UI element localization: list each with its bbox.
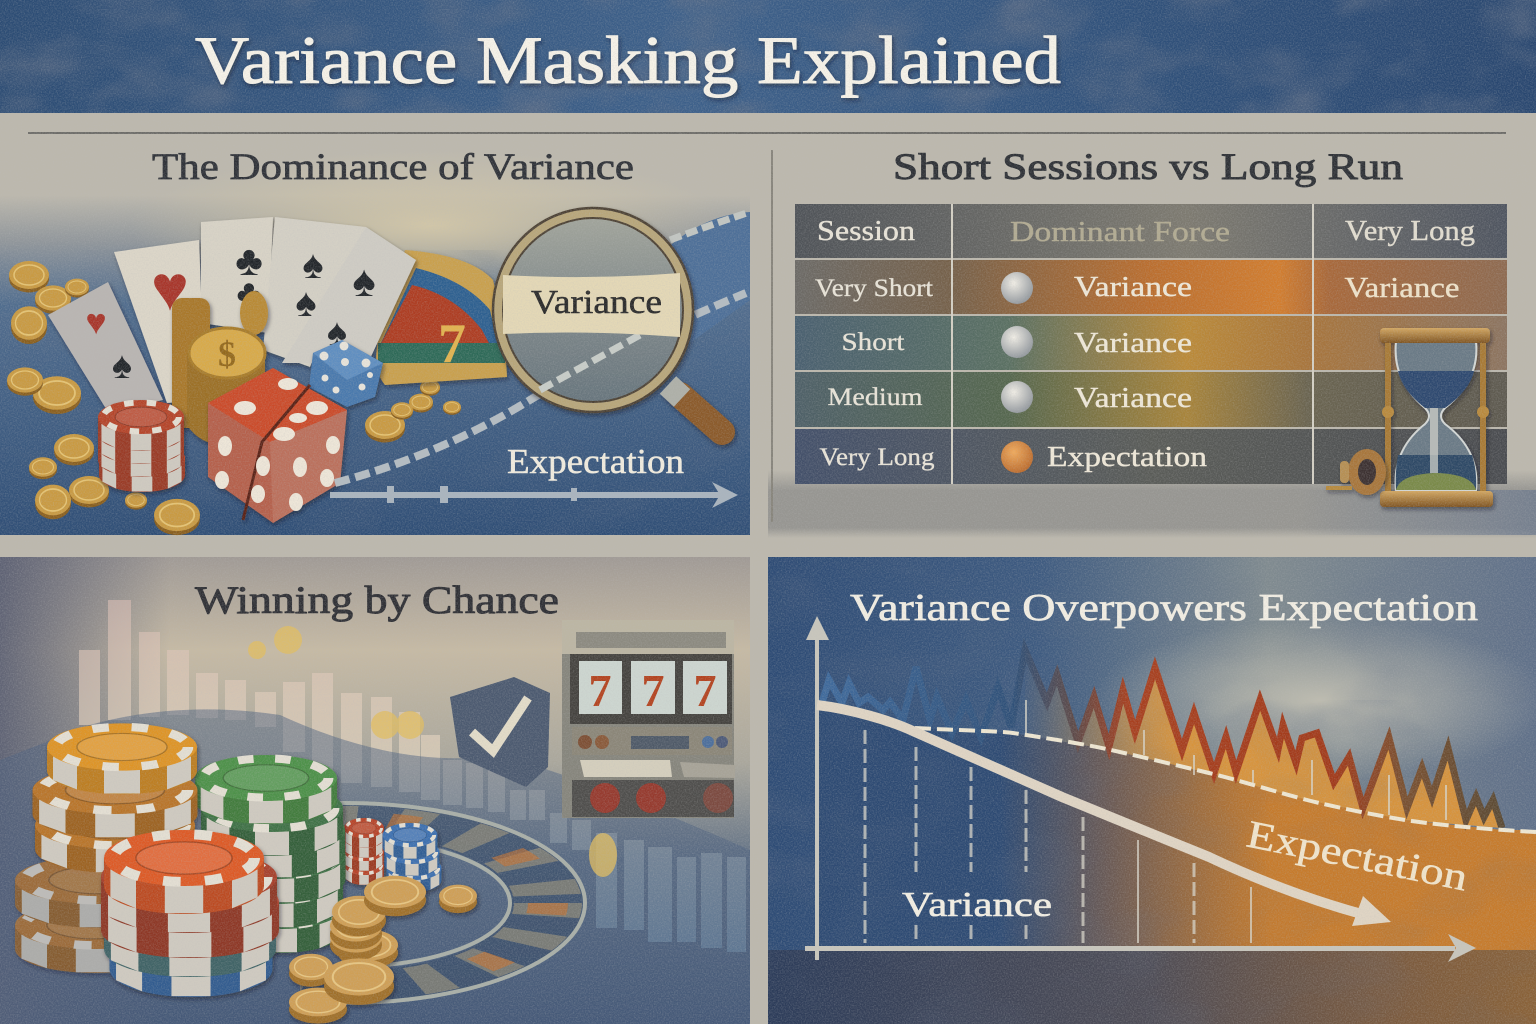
divider: rule under header bbox=[28, 132, 1506, 134]
label: variance ribbon: Variance bbox=[531, 284, 662, 321]
icon: magnifying glass bbox=[493, 208, 722, 432]
arrow: expectation axis bbox=[330, 482, 738, 508]
icon: large red die bbox=[208, 368, 347, 523]
card 3: ♣ bbox=[237, 273, 261, 315]
card 1: ♠ bbox=[112, 345, 132, 387]
chart: vertical dashed guides bbox=[865, 700, 1446, 943]
panel: winning by chance bbox=[0, 557, 750, 1024]
chart: orange region under trend bbox=[817, 705, 1536, 950]
icon: gold coin piles bbox=[289, 876, 477, 1024]
row: very short: Variance bbox=[1074, 271, 1192, 303]
icon: stack of gold coins bbox=[172, 291, 268, 445]
icon: small chip stacks bbox=[344, 818, 442, 892]
panel: short sessions vs long run bbox=[768, 147, 1536, 538]
card 4: ♠ bbox=[295, 280, 317, 325]
arrow: expectation decline bbox=[817, 705, 1391, 926]
table header row: Dominant Force bbox=[1010, 216, 1230, 248]
icon: small blue die bbox=[309, 340, 383, 407]
table: session comparison bbox=[795, 204, 1507, 484]
icon: slot machine: 7 bbox=[694, 665, 716, 716]
heading: short sessions vs long run: Short Sessions vs Long Run bbox=[893, 147, 1403, 188]
label: expectation: Expectation bbox=[1243, 813, 1471, 899]
icon: stack of gold coins: $ bbox=[218, 334, 236, 374]
icon: wave band behind magnifier bbox=[660, 212, 750, 350]
icon: brass stopwatch bbox=[1326, 449, 1386, 495]
chart: dashed trend line bbox=[915, 728, 1536, 832]
title: Variance Masking Explained bbox=[195, 22, 1061, 98]
icon: scattered gold coins bbox=[7, 261, 461, 535]
label: variance ribbon bbox=[503, 273, 680, 337]
table header row bbox=[795, 204, 1507, 258]
card 5 bbox=[282, 227, 416, 363]
card 1 bbox=[48, 282, 163, 412]
row: medium: Variance bbox=[1074, 382, 1192, 414]
header band bbox=[0, 0, 1536, 113]
row: medium: Medium bbox=[828, 384, 923, 411]
row: very long bbox=[795, 429, 1507, 484]
icon: roulette wheel: 7 bbox=[438, 313, 466, 375]
icon: gold sparkles bbox=[248, 626, 617, 877]
card 4: ♠ bbox=[302, 242, 324, 287]
chart: faded bars bbox=[79, 600, 746, 952]
icon: poker chip stack bbox=[98, 400, 185, 492]
row: short bbox=[795, 316, 1507, 370]
card 5: ♠ bbox=[327, 312, 347, 354]
row: short: Short bbox=[842, 329, 905, 356]
icon: hourglass bbox=[1380, 328, 1493, 507]
table header row: Very Long bbox=[1345, 216, 1475, 247]
heading: the dominance of variance: The Dominance of Variance bbox=[152, 147, 634, 188]
icon: red chip stack bbox=[101, 830, 279, 997]
hill shading bbox=[0, 709, 750, 1024]
heading: winning by chance: Winning by Chance bbox=[195, 579, 559, 622]
icon: green chip stack bbox=[195, 755, 346, 953]
card 2 bbox=[114, 240, 205, 403]
card 5: ♠ bbox=[352, 257, 376, 306]
card 3: ♣ bbox=[235, 239, 263, 285]
icon: slot machine bbox=[562, 620, 735, 818]
icon: slot machine: 7 bbox=[588, 665, 612, 716]
row: very long: Very Long bbox=[820, 444, 935, 471]
icon: playing cards bbox=[48, 217, 416, 412]
heading: variance overpowers expectation: Variance Overpowers Expectation bbox=[850, 587, 1478, 629]
table header row: Session bbox=[817, 216, 915, 247]
chart: rising dashed path bbox=[335, 293, 746, 483]
label: variance: Variance bbox=[902, 885, 1052, 924]
icon: slot machine: 7 bbox=[642, 665, 664, 716]
panel: variance overpowers expectation bbox=[768, 557, 1536, 1024]
chart: floor below axis bbox=[768, 950, 1536, 1024]
row: short: Variance bbox=[1074, 327, 1192, 359]
chart: line chart axes bbox=[805, 616, 1476, 962]
card 2: ♥ bbox=[151, 253, 189, 324]
chart: filled area under jagged line bbox=[1025, 650, 1502, 828]
row: very long: Expectation bbox=[1047, 441, 1208, 473]
icon: roulette wheel bbox=[376, 250, 507, 385]
mottled texture over chart bbox=[768, 700, 1536, 1024]
row: very short: Variance bbox=[1344, 272, 1460, 304]
card 3 bbox=[201, 217, 273, 333]
divider: vertical rule between top panels bbox=[771, 150, 773, 522]
card 4 bbox=[263, 217, 366, 367]
chart: jagged variance line bbox=[822, 650, 1502, 828]
row: very short: Very Short bbox=[815, 275, 933, 302]
row: medium bbox=[795, 372, 1507, 427]
row: very short bbox=[795, 260, 1507, 314]
card 1: ♥ bbox=[85, 302, 107, 342]
icon: orange chip stack bbox=[15, 723, 197, 973]
icon: shield with check bbox=[450, 677, 550, 787]
icon: roulette track bbox=[300, 801, 587, 1005]
panel: the dominance of variance bbox=[0, 140, 750, 535]
label: expectation: Expectation bbox=[507, 442, 684, 481]
